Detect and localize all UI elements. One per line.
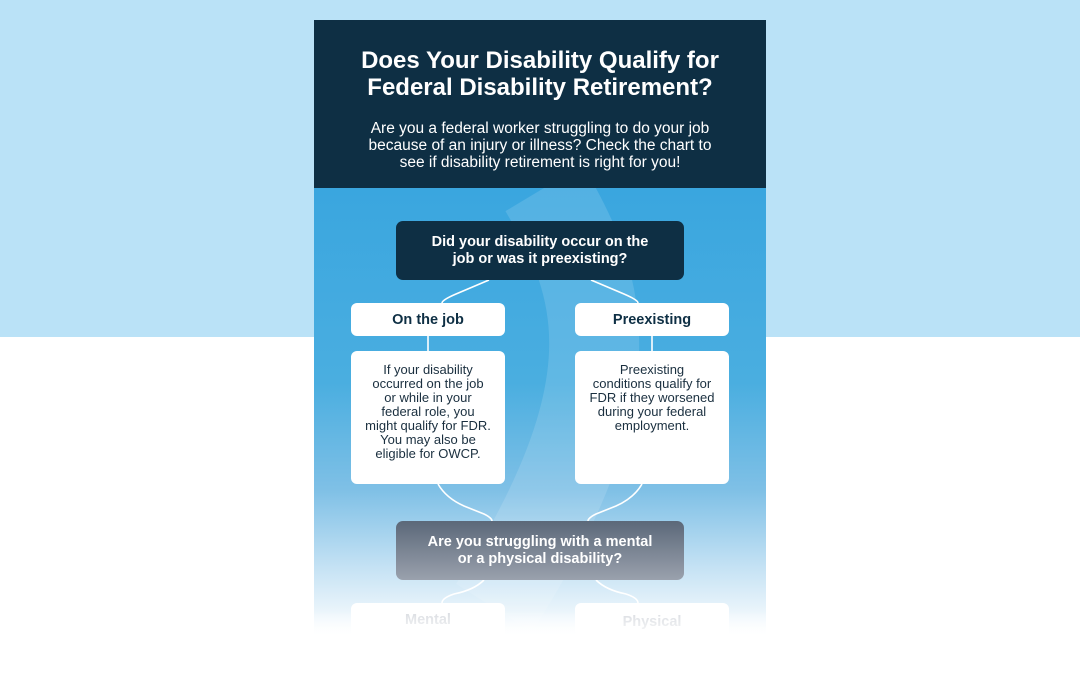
- text: preexisting: conditions qualify for: [593, 376, 711, 391]
- text: preexisting: [575, 351, 729, 484]
- text: on the job: or while in your: [384, 390, 472, 405]
- option: on the job: On the job: [392, 312, 464, 328]
- text: preexisting: Preexisting: [620, 362, 684, 377]
- option: preexisting: [575, 303, 729, 336]
- connectors: [427, 280, 653, 603]
- option: mental: [351, 603, 505, 637]
- subtitle: see if disability retirement is right for you!: [400, 154, 680, 171]
- text: on the job: You may also be: [380, 432, 476, 447]
- question 2 box: Are you struggling with a mental: [428, 534, 652, 550]
- option: on the job: [351, 303, 505, 336]
- header panel: [314, 20, 766, 188]
- question 1 box: job or was it preexisting?: [453, 250, 627, 266]
- question 1 box: Did your disability occur on the: [432, 234, 648, 250]
- question 2 box: or a physical disability?: [458, 550, 622, 566]
- text: on the job: might qualify for FDR.: [365, 418, 491, 433]
- option: mental: Mental: [405, 612, 451, 628]
- text: on the job: federal role, you: [381, 404, 475, 419]
- text: preexisting: during your federal: [598, 404, 706, 419]
- title: [361, 47, 719, 101]
- text: on the job: If your disability: [383, 362, 473, 377]
- question 1 box: [396, 221, 684, 280]
- text: on the job: eligible for OWCP.: [375, 446, 481, 461]
- subtitle: [369, 120, 711, 171]
- subtitle: because of an injury or illness? Check the chart to: [369, 137, 711, 154]
- text: preexisting: FDR if they worsened: [590, 390, 714, 405]
- infographic card: [314, 20, 766, 675]
- text: on the job: [351, 351, 505, 484]
- question 2 box: [396, 521, 684, 580]
- flowchart body: [314, 188, 766, 675]
- title: Does Your Disability Qualify for: [361, 47, 719, 74]
- option: preexisting: Preexisting: [613, 312, 691, 328]
- option: physical: [575, 603, 729, 637]
- text: on the job: occurred on the job: [372, 376, 484, 391]
- subtitle: Are you a federal worker struggling to do your job: [371, 120, 709, 137]
- text: preexisting: employment.: [615, 418, 689, 433]
- title: Federal Disability Retirement?: [367, 74, 713, 101]
- option: physical: Physical: [623, 614, 681, 630]
